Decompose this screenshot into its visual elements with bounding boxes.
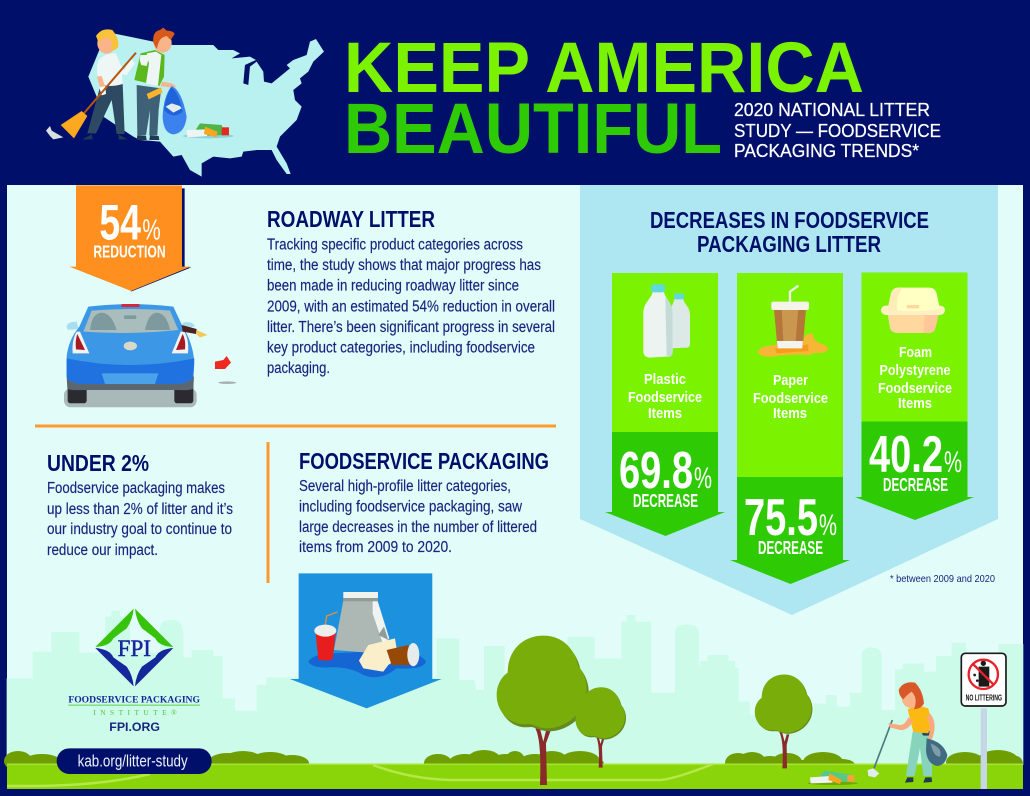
foodservice packaging text block: items from 2009 to 2020. xyxy=(299,539,452,556)
panel heading xyxy=(650,207,929,257)
panel: decreases in foodservice packaging litter xyxy=(580,185,998,615)
header subtitle: PACKAGING TRENDS* xyxy=(734,140,919,161)
icon: paper cup with spill xyxy=(758,286,828,357)
orange 54% reduction arrow: REDUCTION xyxy=(93,242,166,262)
foodservice packaging text block: including foodservice packaging, saw xyxy=(299,498,523,516)
header subtitle: STUDY — FOODSERVICE xyxy=(734,120,941,141)
paper percentage: % xyxy=(819,509,837,542)
plastic percentage: DECREASE xyxy=(633,491,698,511)
header illustration: map with volunteers xyxy=(46,28,324,177)
plastic label: Items xyxy=(648,405,682,422)
logo diamond xyxy=(95,609,173,686)
litter pile xyxy=(183,123,234,138)
small tree xyxy=(575,687,626,768)
woman picking up litter xyxy=(868,682,947,783)
trees xyxy=(497,636,626,785)
logo diamond: FPI xyxy=(118,636,151,662)
roadway litter text block: ROADWAY LITTER xyxy=(267,206,435,232)
website: FPI.ORG xyxy=(109,720,160,734)
paper label: Foodservice xyxy=(753,390,828,407)
right tree xyxy=(755,674,812,768)
roadway litter text block: key product categories, including foodservice xyxy=(267,340,535,357)
roadway litter text block: litter. There’s been significant progress in several xyxy=(267,319,555,336)
under 2% text block: Foodservice packaging makes xyxy=(47,480,225,497)
paper label: Paper xyxy=(773,372,808,389)
column: paper foodservice items xyxy=(730,273,850,584)
panel heading: DECREASES IN FOODSERVICE xyxy=(650,207,929,233)
foodservice packaging text block: large decreases in the number of littered xyxy=(299,519,537,536)
foam label: Items xyxy=(898,395,932,412)
logo wordmark: FOODSERVICE PACKAGING xyxy=(68,696,200,706)
large tree xyxy=(497,636,589,785)
icon: bottles xyxy=(643,284,690,358)
under 2% text block: UNDER 2% xyxy=(47,450,149,476)
link pill: kab.org/litter-study xyxy=(78,752,188,771)
logo wordmark xyxy=(68,696,200,717)
roadway litter text block: packaging. xyxy=(267,360,330,377)
under 2% text block xyxy=(47,450,233,559)
roadway litter text block: Tracking specific product categories across xyxy=(267,236,523,254)
plastic percentage: 69.8 xyxy=(619,442,693,500)
column: plastic foodservice items xyxy=(605,273,725,536)
blue arrow with foodservice litter xyxy=(290,573,442,708)
FPI logo xyxy=(57,609,212,774)
plastic label: Foodservice xyxy=(628,389,702,406)
plastic percentage: % xyxy=(694,462,712,495)
foam percentage: % xyxy=(944,446,962,479)
under 2% text block: up less than 2% of litter and it’s xyxy=(47,501,233,518)
illustration: car with litter thrown from window xyxy=(64,304,236,407)
orange 54% reduction arrow: % xyxy=(142,214,161,246)
roadway litter text block: 2009, with an estimated 54% reduction in overall xyxy=(267,298,555,316)
foam label: Foam xyxy=(899,344,932,361)
link pill xyxy=(57,748,212,774)
foodservice packaging text block xyxy=(299,448,549,556)
no littering sign xyxy=(961,653,1006,789)
litter pile on grass xyxy=(808,771,858,785)
icon: foam clamshell xyxy=(881,288,945,333)
panel heading: PACKAGING LITTER xyxy=(697,231,881,257)
paper label xyxy=(753,372,828,422)
header subtitle xyxy=(734,99,941,161)
foodservice packaging text block: Several high-profile litter categories, xyxy=(299,478,511,495)
foam label xyxy=(878,344,952,412)
paper percentage: DECREASE xyxy=(758,538,823,558)
header subtitle: 2020 NATIONAL LITTER xyxy=(734,99,930,120)
header title: KEEP AMERICA xyxy=(344,29,864,108)
ground xyxy=(7,764,1023,789)
foam label: Foodservice xyxy=(878,380,952,397)
under 2% text block: reduce our impact. xyxy=(47,542,158,559)
header title: BEAUTIFUL xyxy=(344,90,722,169)
plastic label: Plastic xyxy=(644,371,686,388)
column: foam polystyrene foodservice items xyxy=(855,272,974,520)
orange 54% reduction arrow xyxy=(69,185,191,292)
woman with broom xyxy=(46,29,136,139)
foam percentage: DECREASE xyxy=(883,475,948,495)
foam percentage: 40.2 xyxy=(869,426,943,484)
background city skyline xyxy=(7,611,1023,767)
under 2% text block: our industry goal to continue to xyxy=(47,521,232,538)
footnote: * between 2009 and 2020 xyxy=(890,573,995,585)
orange 54% reduction arrow: 54 xyxy=(99,194,141,250)
roadway litter text block xyxy=(267,206,555,377)
logo wordmark: INSTITUTE® xyxy=(93,708,177,717)
roadway litter text block: time, the study shows that major progress has xyxy=(267,257,541,274)
paper label: Items xyxy=(773,405,807,422)
no littering sign: NO LITTERING xyxy=(966,694,1002,703)
map of the United States xyxy=(88,33,324,177)
foodservice packaging text block: FOODSERVICE PACKAGING xyxy=(299,448,549,474)
roadway litter text block: been made in reducing roadway litter since xyxy=(267,278,519,295)
bushes xyxy=(4,750,1023,773)
header title xyxy=(344,29,864,169)
foam label: Polystyrene xyxy=(880,362,950,379)
man with trash bag xyxy=(134,28,187,140)
paper percentage: 75.5 xyxy=(744,489,818,547)
plastic label xyxy=(628,371,702,422)
